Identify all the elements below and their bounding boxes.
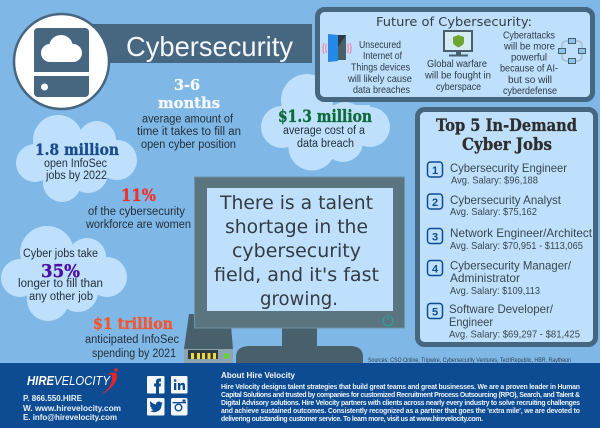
monitor message: growing. — [260, 288, 338, 310]
text: internet of things: Unsecured — [359, 39, 401, 51]
logo: hire velocity: HIREVELOCITY — [27, 374, 111, 388]
cloud: data breach: data breach — [297, 138, 354, 150]
text: cyberattacks: Cyberattacks — [503, 30, 555, 42]
monitor message: cybersecurity — [232, 240, 361, 262]
stat: $1 trillion — [85, 314, 179, 360]
job 5: Avg. Salary: $69,297 - $81,425 — [449, 328, 580, 340]
icon: twitter — [147, 398, 164, 416]
icon: smart door — [323, 34, 351, 62]
job 4: 4 — [432, 264, 439, 276]
icon: linkedin — [171, 376, 188, 394]
text: internet of things: data breaches — [353, 84, 410, 96]
monitor message — [214, 192, 379, 310]
job 4: Cybersecurity Manager/ — [450, 258, 572, 272]
icon: instagram — [171, 398, 188, 416]
icon: monitor shield — [444, 31, 472, 56]
job 3: 3 — [432, 232, 438, 244]
stat: 3-6 months: open cyber position — [141, 139, 236, 151]
job 1: 1 — [432, 165, 438, 177]
icon: network nodes — [558, 38, 586, 64]
stat: 1.8 million: 1.8 million — [35, 140, 119, 159]
heading: top 5 jobs — [436, 116, 577, 155]
stat: 3-6 months — [137, 76, 241, 151]
job 1: Cybersecurity Engineer — [450, 161, 567, 175]
stat: 3-6 months: average amount of — [142, 114, 234, 126]
panel: top 5 jobs — [418, 110, 596, 344]
icon: facebook — [147, 376, 164, 394]
heading: top 5 jobs: Cyber Jobs — [462, 135, 552, 155]
cloud: 35%: any other job — [29, 291, 93, 303]
monitor — [194, 177, 404, 363]
cloud: 35%: Cyber jobs take — [23, 248, 98, 260]
stat: 3-6 months: 3-6 — [174, 76, 200, 94]
job 2: Cybersecurity Analyst — [450, 193, 562, 207]
title banner — [90, 24, 312, 63]
cloud: 1.8 million — [16, 115, 137, 202]
job 5 — [428, 302, 580, 340]
cloud: data breach — [261, 74, 390, 170]
cloud: 35%: longer to fill than — [18, 278, 103, 290]
sources: Sources: CSO Online, Tripwire, Cybersecurity Ventures, TechRepublic, HBR, Raytheon — [368, 357, 571, 364]
stat: $1.3 million: $1.3 million — [278, 107, 372, 127]
job 3 — [428, 226, 593, 252]
text: internet of things: will likely cause — [347, 73, 412, 85]
panel: future of cybersecurity — [318, 10, 592, 100]
text: global warfare — [424, 58, 491, 93]
job 2 — [428, 193, 562, 218]
stat: 11%: workforce are women — [85, 219, 191, 231]
logo: hire velocity — [27, 368, 118, 395]
text: cyberattacks — [500, 30, 558, 97]
job 4: Administrator — [450, 271, 520, 285]
icon: power button — [383, 314, 393, 326]
job 5: Software Developer/ — [449, 302, 554, 316]
job 4: Avg. Salary: $109,113 — [450, 285, 540, 297]
contact details: W. www.hirevelocity.com — [23, 403, 121, 413]
stat: 11%: 11% — [121, 186, 156, 206]
footer band — [0, 363, 600, 428]
job 2: 2 — [432, 197, 438, 209]
job 3: Network Engineer/Architect — [450, 226, 593, 240]
title banner: Cybersecurity — [126, 31, 293, 62]
monitor message: field, and it's fast — [214, 264, 379, 286]
icon: network router — [184, 314, 233, 363]
contact details: E. info@hirevelocity.com — [23, 412, 117, 422]
about text: Hire Velocity designs talent strategies that build great teams and great businesses. We are a proven leader in Human — [221, 384, 580, 391]
text: cyberattacks: powerful — [511, 52, 547, 64]
job 2: Avg. Salary: $75,162 — [450, 206, 537, 218]
job 1: Avg. Salary: $96,188 — [451, 174, 538, 186]
contact details: P. 866.550.HIRE — [23, 393, 82, 403]
about text — [221, 384, 580, 423]
stat: $1 trillion: spending by 2021 — [92, 348, 176, 360]
stat: 35%: 35% — [41, 262, 80, 282]
about text: and achieve sustained outcomes. Consistently recognized as a partner that goes the 'extra mile', we are devoted to — [221, 408, 580, 415]
icon: cloud server — [14, 14, 109, 109]
text: cyberattacks: because of AI- — [500, 62, 558, 74]
stat: 11%: of the cybersecurity — [88, 206, 185, 218]
cloud: data breach: average cost of a — [283, 125, 366, 137]
job 1 — [428, 161, 567, 186]
text: global warfare: Global warfare — [427, 58, 487, 70]
text: global warfare: will be fought in — [424, 70, 491, 82]
text: internet of things: Internet of — [363, 50, 402, 62]
monitor message: There is a talent — [219, 192, 373, 214]
heading: future of cybersecurity: Future of Cybersecurity: — [376, 14, 532, 29]
job 3: Avg. Salary: $70,951 - $113,065 — [450, 240, 583, 252]
stat: 3-6 months: months — [158, 94, 220, 112]
text: internet of things: Things devices — [351, 62, 410, 74]
cloud: 1.8 million: jobs by 2022 — [45, 170, 107, 182]
heading: top 5 jobs: Top 5 In-Demand — [436, 116, 577, 136]
stat: $1 trillion: anticipated InfoSec — [85, 334, 179, 346]
about text: delivering outstanding customer service. To learn more, visit us at www.hirevelocity.com. — [221, 416, 483, 423]
text: cyberattacks: cyberdefense — [503, 85, 557, 97]
cloud: 35% — [1, 226, 127, 321]
cloud: 1.8 million: open InfoSec — [44, 158, 107, 170]
about text: Capital Solutions and trusted by companies for customized Recruitment Process Outsourcing (RPO), Search, and Talent & — [221, 392, 580, 399]
job 5: 5 — [432, 306, 438, 318]
text: global warfare: cyberspace — [436, 81, 481, 93]
text: cyberattacks: but so will — [508, 74, 552, 86]
job 4 — [428, 258, 572, 297]
text: cyberattacks: will be more — [503, 40, 555, 52]
about text: Digital Advisory solutions. Hire Velocity partners with clients across nearly every industry to solve recruiting challenges — [221, 400, 580, 407]
stat: 3-6 months: time it takes to fill an — [137, 126, 241, 138]
stat: $1 trillion: $1 trillion — [93, 314, 173, 333]
text: internet of things — [347, 39, 412, 96]
heading: about hire velocity: About Hire Velocity — [221, 371, 295, 380]
job 5: Engineer — [449, 315, 493, 329]
monitor message: shortage in the — [225, 216, 368, 238]
stat: 11% — [85, 186, 191, 231]
contact details — [23, 393, 121, 422]
